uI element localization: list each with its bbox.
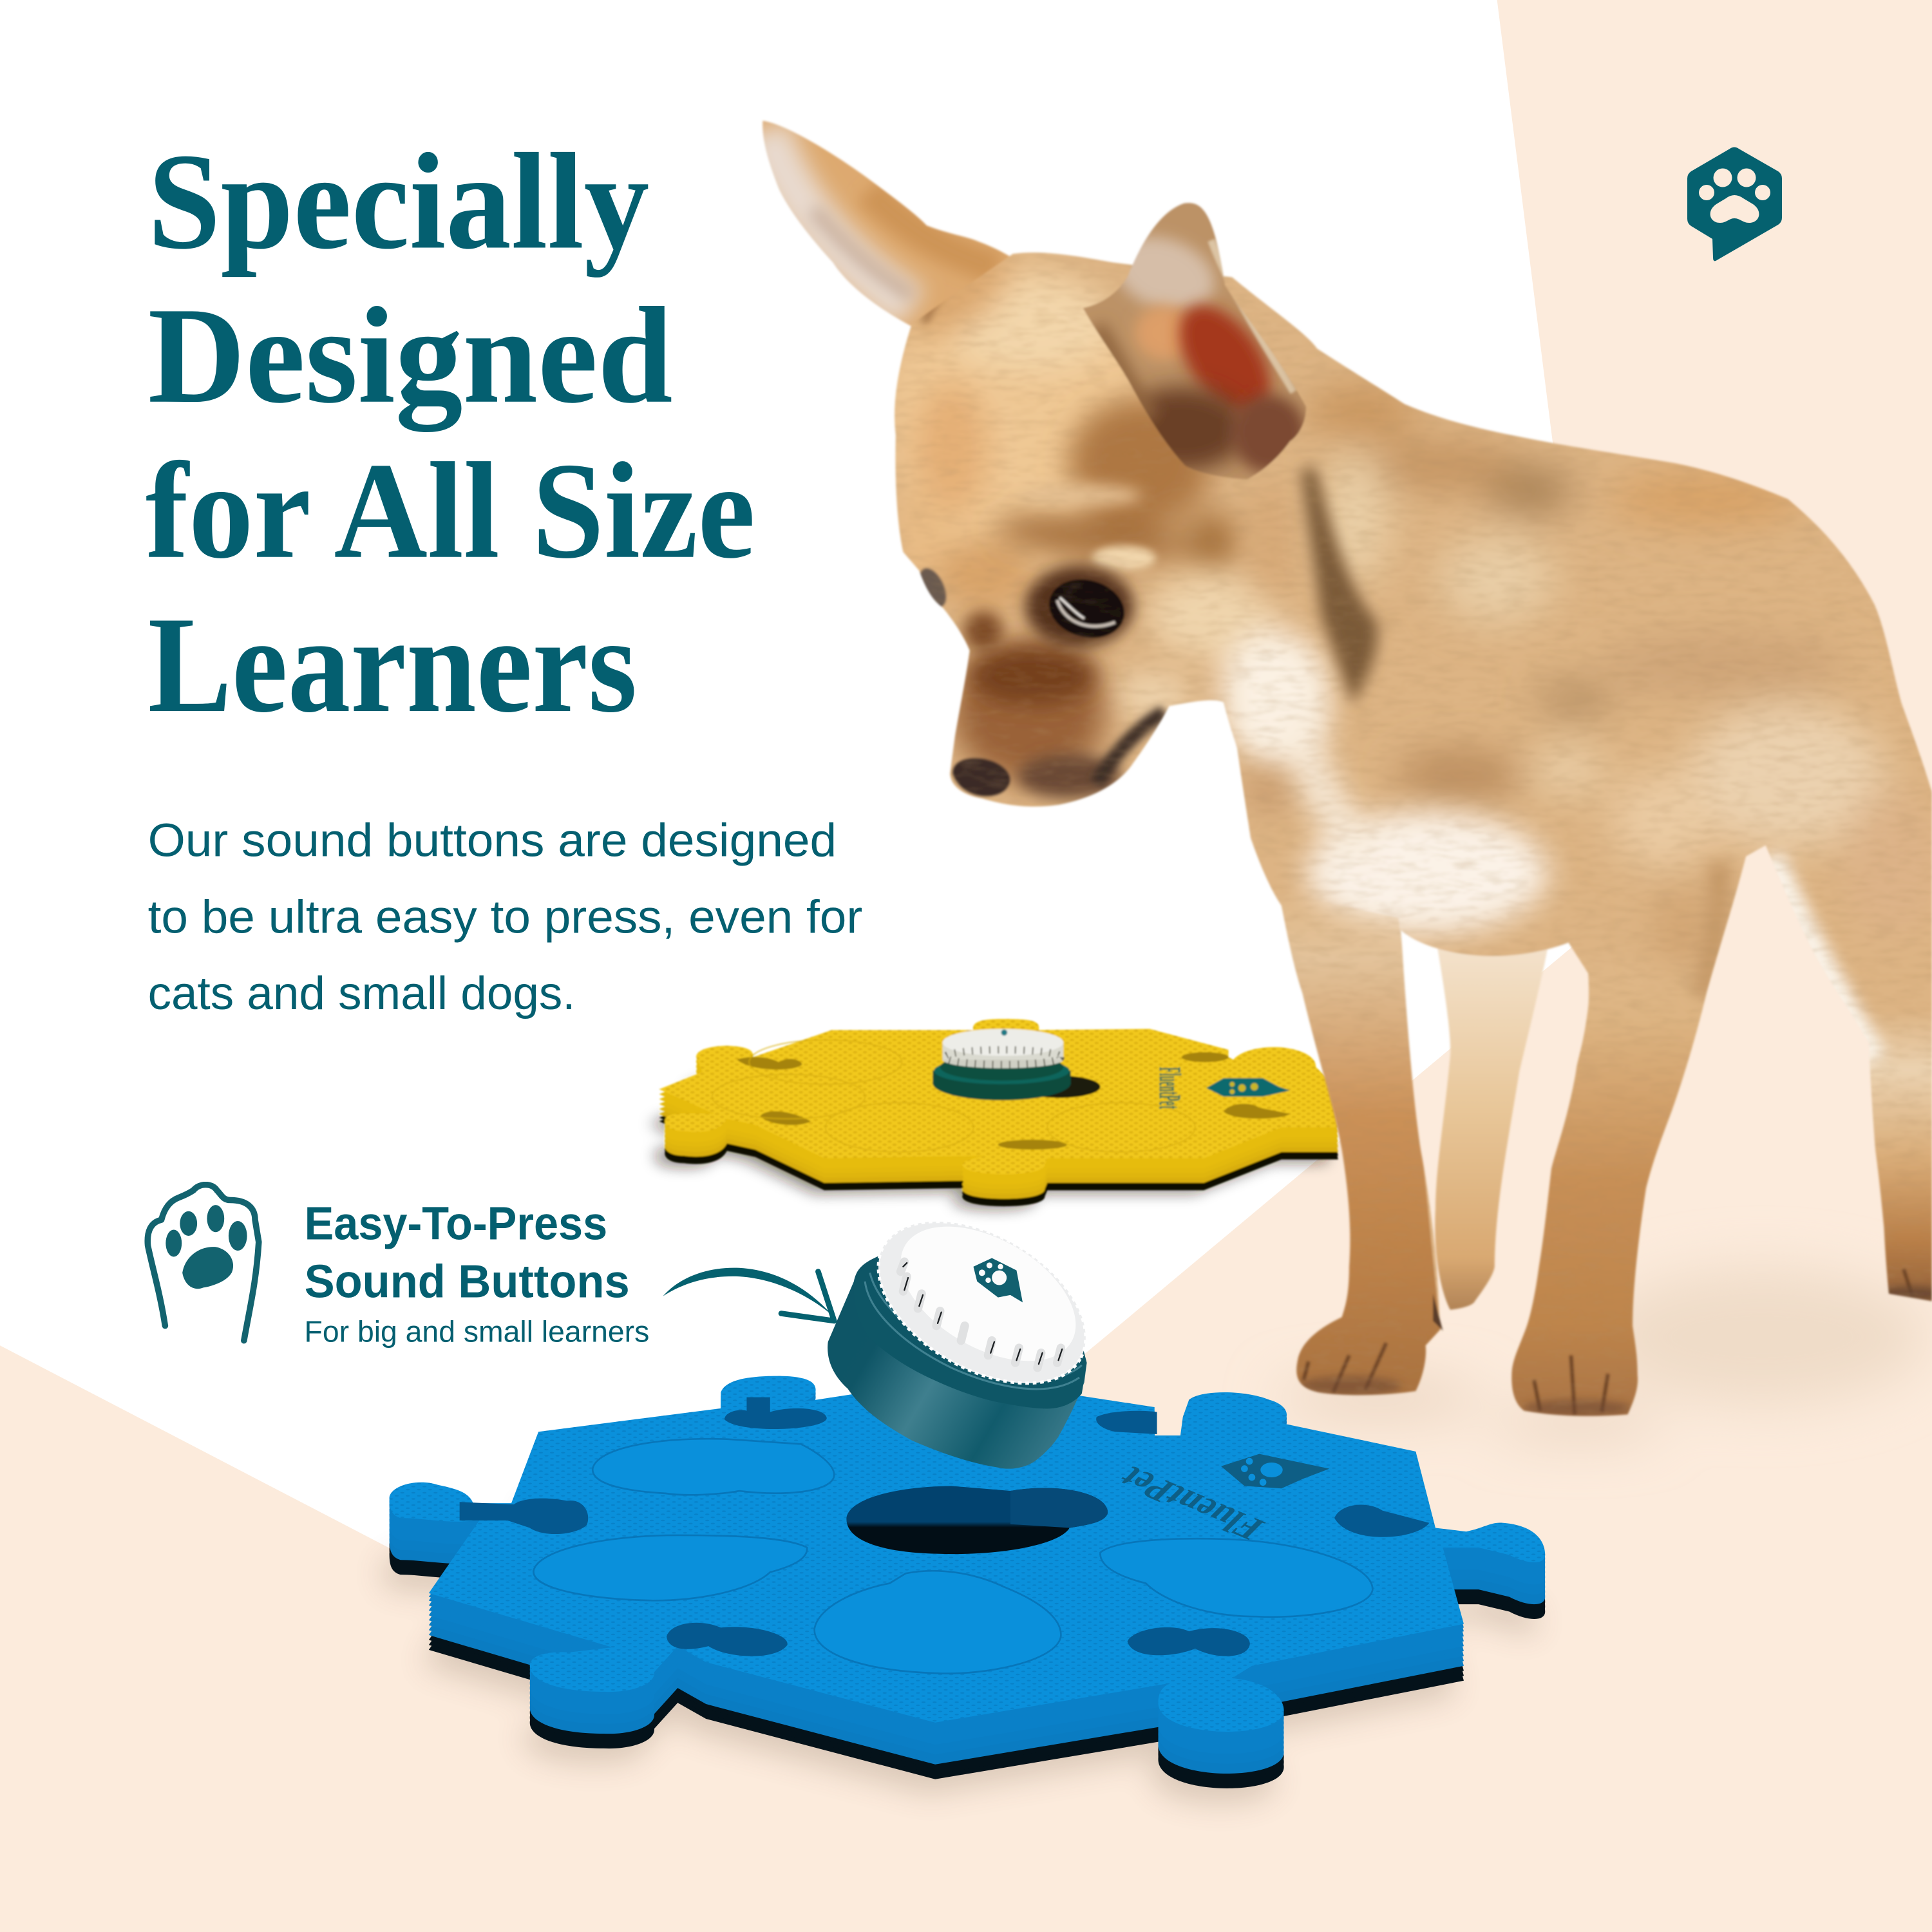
claw on near foot	[1433, 1294, 1443, 1331]
sound button	[828, 1188, 1113, 1469]
body text: cats and small dogs.	[148, 967, 575, 1019]
blue board logo: FluentPet	[1110, 1460, 1273, 1546]
title: Specially	[148, 126, 649, 278]
right ear	[1072, 197, 1318, 487]
blue board with sockets	[382, 1376, 1545, 1803]
head shading	[895, 261, 1136, 612]
dog body and head base	[862, 234, 1932, 1429]
feature heading and caption	[305, 1198, 649, 1349]
feature heading and caption: Easy-To-Press	[305, 1198, 607, 1250]
nose	[952, 758, 1010, 797]
yellow board slots	[737, 1052, 1290, 1150]
dark neck streak	[1301, 468, 1378, 705]
yellow board shadow	[649, 1054, 1329, 1209]
yellow board hole	[1019, 1075, 1101, 1098]
title: Learners	[148, 589, 637, 741]
blue board top face	[390, 1376, 1545, 1732]
yellow board logo	[1152, 1067, 1290, 1109]
small sound button on yellow board	[933, 1029, 1071, 1101]
far eye	[914, 564, 952, 611]
easy-to-press paw icon	[147, 1185, 259, 1341]
dog photo illustration	[752, 111, 1932, 1429]
yellow board base	[659, 1024, 1338, 1206]
fur texture	[862, 234, 1932, 1429]
feature heading and caption: For big and small learners	[305, 1315, 649, 1349]
muzzle	[952, 611, 1121, 799]
arrow to button	[663, 1268, 834, 1321]
title	[146, 126, 755, 741]
icon: brand logo hexagon with paw	[1687, 147, 1782, 261]
toes and claws	[1303, 1269, 1912, 1414]
title: Designed	[148, 279, 673, 432]
button white cap	[851, 1188, 1113, 1417]
eye	[1043, 571, 1131, 646]
yellow board logo: FluentPet	[1152, 1067, 1188, 1109]
brow shading	[992, 398, 1243, 572]
button rim ticks	[901, 1262, 1062, 1368]
blue board center hole	[846, 1486, 1108, 1554]
shadow under dog	[1275, 1269, 1928, 1435]
body text	[148, 815, 862, 1019]
yellow board with button	[649, 1019, 1338, 1209]
eye socket	[1025, 565, 1133, 647]
far front leg	[1435, 936, 1548, 1310]
button logo	[973, 1258, 1023, 1302]
button collar highlights	[865, 1273, 1082, 1389]
neck and body shading	[1306, 386, 1932, 982]
body text: to be ultra easy to press, even for	[148, 891, 862, 943]
title: for All Size	[146, 435, 755, 587]
blue board extrusion	[390, 1379, 1545, 1788]
white chest	[1237, 697, 1548, 934]
blue board paw-shaped discs	[533, 1439, 1372, 1674]
cheek and throat	[1113, 480, 1329, 816]
blue board hole wall	[1010, 1488, 1108, 1528]
feature heading and caption: Sound Buttons	[305, 1256, 630, 1308]
blue board shadow	[382, 1448, 1538, 1803]
blue board logo	[1110, 1454, 1329, 1546]
button body	[828, 1256, 1087, 1469]
blue board slots	[460, 1397, 1429, 1656]
background: white angled panel	[0, 0, 1614, 1696]
ear crease	[920, 304, 942, 326]
yellow board paw discs	[712, 1040, 1195, 1152]
yellow board top face	[659, 1019, 1338, 1174]
button collar	[854, 1256, 1087, 1408]
left ear	[761, 120, 1010, 327]
legs	[1257, 887, 1448, 1405]
body text: Our sound buttons are designed	[148, 815, 837, 867]
